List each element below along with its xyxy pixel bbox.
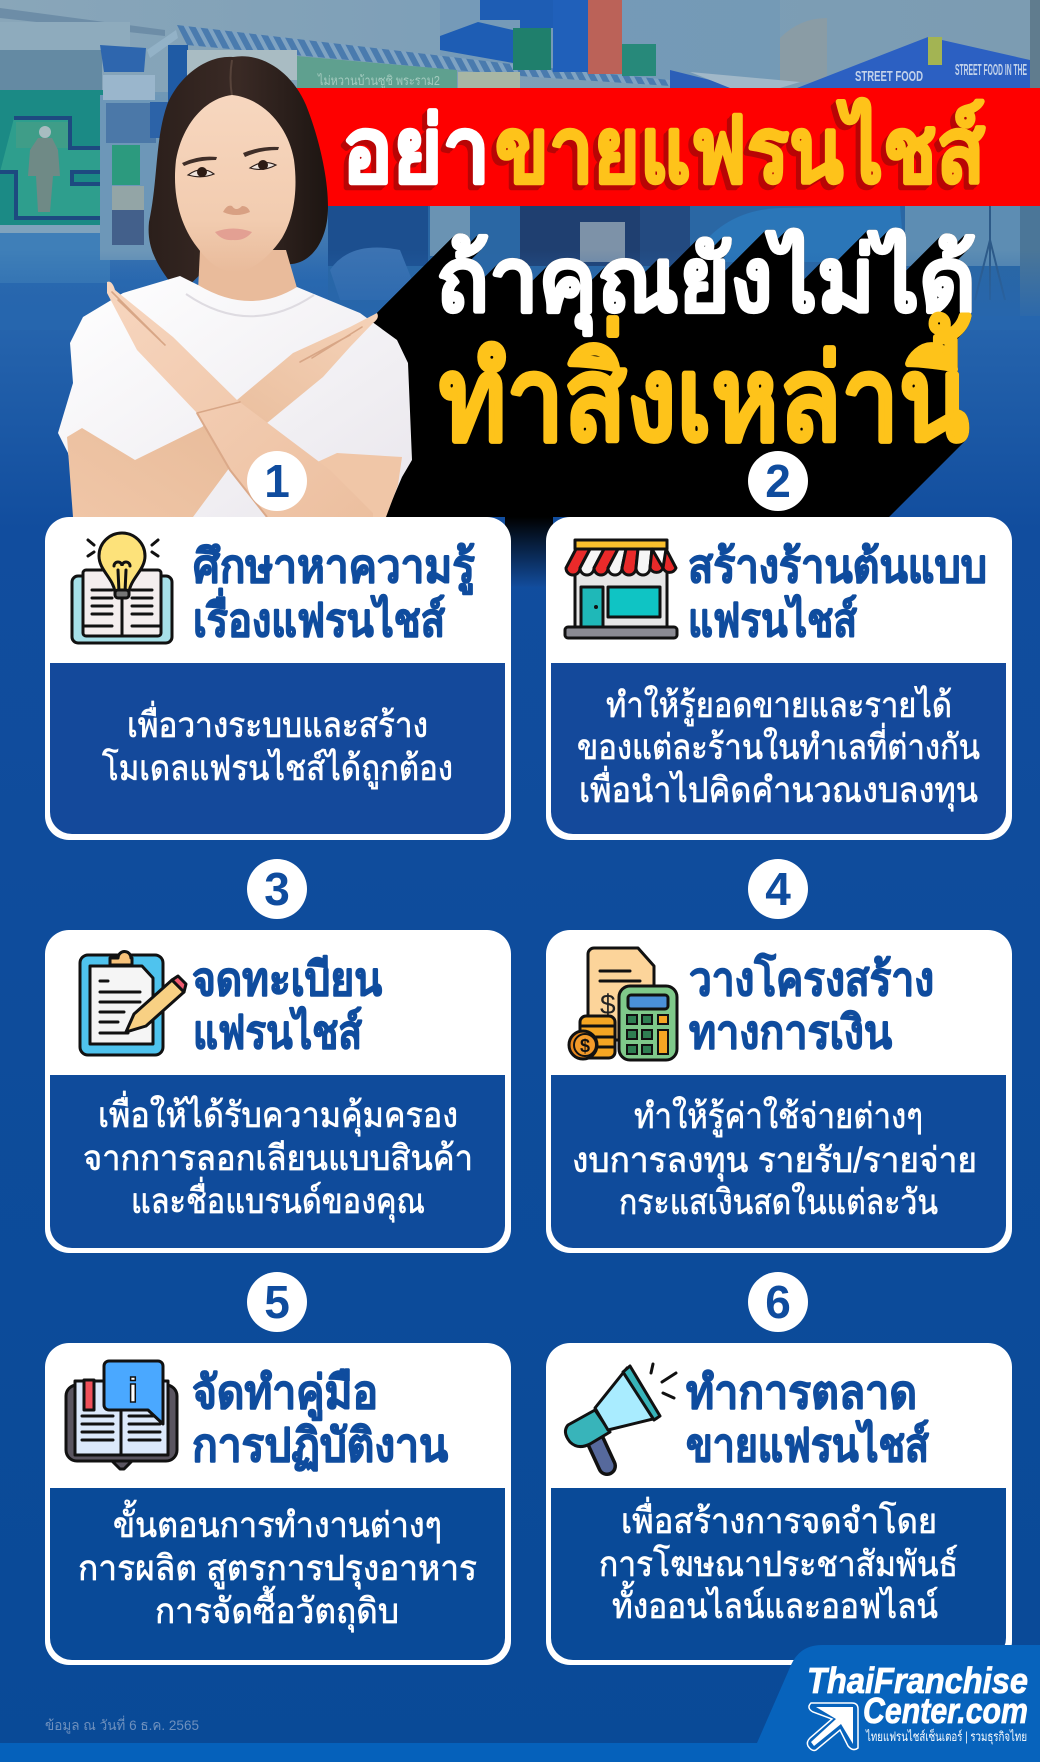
step number 1	[247, 451, 307, 511]
step number 5	[247, 1272, 307, 1332]
icon: book with light bulb	[72, 533, 172, 643]
card 5 body: ขั้นตอนการทำงานต่างๆ	[113, 1499, 442, 1545]
card 3 heading: แฟรนไชส์	[193, 1006, 363, 1058]
card 4 heading	[689, 952, 934, 1058]
banner heading: อย่า	[342, 100, 490, 202]
card 4 body: งบการลงทุน รายรับ/รายจ่าย	[572, 1141, 977, 1181]
eyes	[188, 160, 276, 177]
background: kiosk column	[100, 30, 188, 260]
card 6 body: เพื่อสร้างการจดจำโดย	[621, 1497, 937, 1541]
step number 4	[748, 859, 808, 919]
card 2 body: ของแต่ละร้านในทำเลที่ต่างกัน	[577, 723, 980, 767]
card 6 body	[599, 1497, 958, 1626]
background: street food banner: STREET FOOD	[855, 68, 923, 85]
upper arm right	[300, 453, 402, 517]
hair	[149, 56, 328, 294]
card 2 heading: สร้างร้านต้นแบบ	[688, 540, 987, 592]
card 5 body	[78, 1499, 477, 1632]
gutter shadow fade	[505, 517, 553, 587]
background: street food banner	[797, 0, 1040, 92]
background: corrugated roof	[177, 25, 740, 88]
card 2 body: ทำให้รู้ยอดขายและรายได้	[606, 685, 952, 726]
card 4	[546, 930, 1012, 1253]
card 4 heading: ทางการเงิน	[689, 1006, 892, 1058]
card 5 heading: จัดทำคู่มือ	[192, 1366, 378, 1421]
card 3	[45, 930, 511, 1253]
hair parting	[230, 60, 232, 96]
neck	[198, 250, 297, 303]
arm crossing in front	[107, 282, 373, 517]
woman crossing arms	[58, 56, 412, 517]
card 6 body: ทั้งออนไลน์และออฟไลน์	[612, 1580, 938, 1626]
background photo: mall street-food fair	[0, 0, 1040, 330]
icon: manual with info bubble	[66, 1361, 177, 1469]
banner heading	[342, 98, 986, 202]
headline line 1: ถ้าคุณยังไม่ได้	[436, 229, 976, 337]
card 1 body: โมเดลแฟรนไชส์ได้ถูกต้อง	[102, 748, 453, 789]
card 3 body: จากการลอกเลียนแบบสินค้า	[83, 1139, 473, 1178]
card 6	[546, 1343, 1012, 1665]
data date note: ข้อมูล ณ วันที่ 6 ธ.ค. 2565	[45, 1716, 199, 1734]
card 1 heading: เรื่องแฟรนไชส์	[193, 588, 446, 646]
icon: invoice, calculator and coins: $	[600, 989, 616, 1020]
card 1	[45, 517, 511, 840]
card 3 body: เพื่อให้ได้รับความคุ้มครอง	[98, 1091, 458, 1136]
card 3 heading	[192, 953, 382, 1058]
background: green shop sign	[297, 56, 457, 90]
background: stacked crates	[440, 0, 656, 76]
step number 3: 3	[264, 863, 290, 915]
bottom strip	[0, 1743, 1040, 1762]
card 2	[546, 517, 1012, 840]
red banner	[296, 88, 1040, 206]
icon: clipboard and pencil	[80, 952, 186, 1055]
card 5 body: การผลิต สูตรการปรุงอาหาร	[78, 1549, 477, 1589]
step number 1: 1	[264, 455, 290, 507]
icon: logo arrow	[807, 1703, 858, 1750]
nose	[223, 206, 250, 215]
icon: shop front	[565, 540, 677, 638]
headline: long black shadow with two text lines	[436, 229, 976, 466]
logo panel	[740, 1645, 1040, 1762]
logo wordmark	[807, 1660, 1028, 1745]
step number 6	[748, 1272, 808, 1332]
eyebrows	[182, 147, 279, 166]
card 1 body	[102, 701, 453, 789]
icon: invoice, calculator and coins: $	[580, 1036, 590, 1056]
card 4 body: ทำให้รู้ค่าใช้จ่ายต่างๆ	[634, 1096, 923, 1137]
face	[175, 95, 296, 272]
background: green shop sign: ไม่หวานบ้านซูชิ พระราม2	[317, 73, 440, 89]
step number 5: 5	[264, 1276, 290, 1328]
card 1 heading: ศึกษาหาความรู้	[193, 540, 475, 595]
card 4 heading: วางโครงสร้าง	[689, 952, 934, 1005]
headline line 2: ทำสิ่งเหล่านี้	[439, 313, 971, 466]
icon: megaphone	[565, 1364, 676, 1466]
card 3 body	[83, 1091, 473, 1222]
card 4 body: กระแสเงินสดในแต่ละวัน	[619, 1182, 938, 1222]
shirt	[58, 276, 412, 517]
arm crossing behind	[67, 313, 378, 517]
background: pillar	[780, 18, 827, 82]
card 6 heading	[686, 1366, 930, 1471]
neckline shading	[186, 294, 314, 316]
card 5 heading: การปฏิบัติงาน	[192, 1419, 449, 1471]
step number 3	[247, 859, 307, 919]
card 5 body: การจัดซื้อวัตถุดิบ	[155, 1585, 399, 1632]
card 4 body	[572, 1096, 977, 1222]
card 1 heading	[193, 540, 475, 646]
background: shoppers below banner	[0, 206, 1040, 330]
step number 2: 2	[765, 455, 791, 507]
icon: manual with info bubble: i	[128, 1372, 138, 1410]
card 2 body	[577, 685, 980, 811]
card 2 body: เพื่อนำไปคิดคำนวณงบลงทุน	[579, 766, 978, 811]
step number 2	[748, 451, 808, 511]
card 6 body: การโฆษณาประชาสัมพันธ์	[599, 1544, 958, 1584]
card 5	[45, 1343, 511, 1665]
card 6 heading: ทำการตลาด	[686, 1366, 917, 1418]
card 3 body: และชื่อแบรนด์ของคุณ	[131, 1177, 425, 1222]
step number 4: 4	[765, 863, 791, 915]
card 1 body: เพื่อวางระบบและสร้าง	[127, 701, 428, 745]
step number 6: 6	[765, 1276, 791, 1328]
lips	[215, 228, 252, 240]
card 3 heading: จดทะเบียน	[192, 953, 382, 1005]
card 6 heading: ขายแฟรนไชส์	[686, 1419, 930, 1471]
card 5 heading	[192, 1366, 449, 1471]
icon: invoice, calculator and coins	[569, 948, 677, 1060]
background: teal shop front	[0, 90, 110, 283]
card 2 heading	[688, 540, 987, 646]
card 2 heading: แฟรนไชส์	[688, 594, 858, 646]
